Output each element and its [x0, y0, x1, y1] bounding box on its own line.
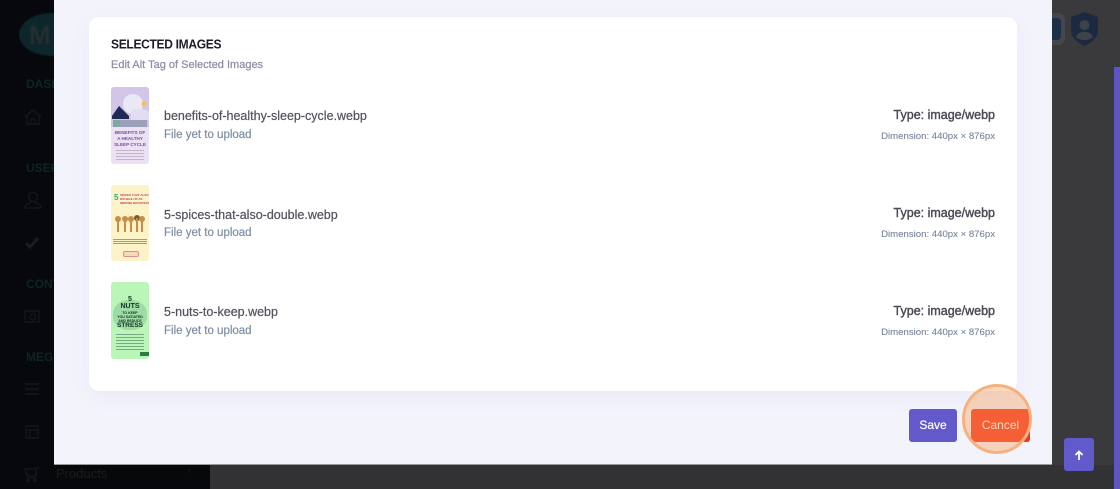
- thumbnail title: [120, 296, 140, 310]
- type 2: Type: image/webp: [894, 206, 995, 220]
- thumbnail title: DOUBLE UP AS: [120, 197, 143, 201]
- status 1: File yet to upload: [164, 129, 252, 141]
- panel: selected images card: [89, 17, 1017, 391]
- thumbnail title: [114, 130, 146, 147]
- thumbnail: sleep cycle: [111, 87, 149, 164]
- sidebar heading: dashboard: DASH: [26, 77, 60, 91]
- thumbnail subtitle: [117, 311, 143, 323]
- icon: check: [25, 237, 39, 249]
- button: cancel: [971, 409, 1030, 442]
- sidebar heading: content: CONT: [26, 277, 60, 291]
- button: cancel: Cancel: [982, 418, 1019, 432]
- thumbnail title: BENEFITS OF: [115, 130, 145, 135]
- sidebar heading: users: USER: [26, 161, 59, 175]
- logo letter: M: [29, 20, 51, 50]
- sidebar logo: [19, 13, 85, 56]
- thumbnail: spices: [111, 185, 149, 261]
- darker footer strip: [210, 465, 1114, 489]
- thumbnail stress: STRESS: [117, 322, 143, 329]
- sidebar heading: mega: MEGA: [26, 350, 62, 364]
- thumbnail title: [120, 193, 149, 205]
- dimension 3: Dimension: 440px × 876px: [881, 327, 995, 338]
- thumbnail badge: [140, 352, 149, 356]
- chevron: ›: [187, 465, 191, 477]
- thumbnail title: 5: [128, 296, 132, 303]
- icon: shield user: [1071, 12, 1098, 46]
- badge inner: [1052, 18, 1061, 40]
- status 3: File yet to upload: [164, 325, 252, 337]
- file name 3: 5-nuts-to-keep.webp: [164, 305, 278, 319]
- illustration: [111, 87, 149, 127]
- purple scrollbar: [1114, 67, 1120, 489]
- subheading: Edit Alt Tag of Selected Images: [111, 59, 263, 71]
- thumbnail: nuts: [111, 282, 149, 359]
- thumbnail title: SPICES THAT ALSO: [120, 193, 149, 197]
- sidebar item: products: Products: [56, 466, 107, 481]
- header avatar badge: [1052, 13, 1065, 45]
- type 3: Type: image/webp: [894, 304, 995, 318]
- thumbnail title: A HEALTHY: [117, 136, 143, 141]
- spoons: [115, 215, 145, 232]
- thumbnail text: [116, 150, 144, 161]
- thumbnail subtitle: TO KEEP: [122, 311, 138, 315]
- heading: selected images: SELECTED IMAGES: [111, 36, 221, 52]
- icon: home: [25, 110, 41, 124]
- thumbnail blob: [113, 300, 147, 330]
- file name 2: 5-spices-that-also-double.webp: [164, 208, 338, 222]
- thumbnail button: [123, 251, 139, 257]
- icon: user: [24, 192, 42, 208]
- type 1: Type: image/webp: [894, 108, 995, 122]
- thumbnail title: NUTS: [120, 303, 140, 310]
- dark sidebar: [0, 0, 210, 489]
- thumbnail number: 5: [114, 193, 118, 202]
- button: save: [909, 409, 957, 442]
- icon: menu: [25, 384, 39, 394]
- status 2: File yet to upload: [164, 227, 252, 239]
- button: scroll to top: [1064, 438, 1094, 471]
- dimension 2: Dimension: 440px × 876px: [881, 229, 995, 240]
- thumbnail text: [116, 334, 144, 352]
- thumbnail text: [113, 239, 147, 244]
- thumbnail title: IMMUNE BOOSTERS: [120, 201, 149, 205]
- thumbnail subtitle: YOU SATIATED: [117, 315, 143, 319]
- icon: up arrow: [1074, 450, 1084, 460]
- icon: layout: [26, 426, 38, 438]
- button: save: Save: [919, 418, 947, 432]
- icon: cart: [24, 466, 39, 482]
- icon: camera: [24, 310, 40, 322]
- thumbnail title: SLEEP CYCLE: [114, 142, 146, 147]
- file name 1: benefits-of-healthy-sleep-cycle.webp: [164, 109, 367, 123]
- dimension 1: Dimension: 440px × 876px: [881, 131, 995, 142]
- thumbnail subtitle: AND REDUCE: [118, 319, 142, 323]
- highlight circle around cancel: [962, 384, 1032, 454]
